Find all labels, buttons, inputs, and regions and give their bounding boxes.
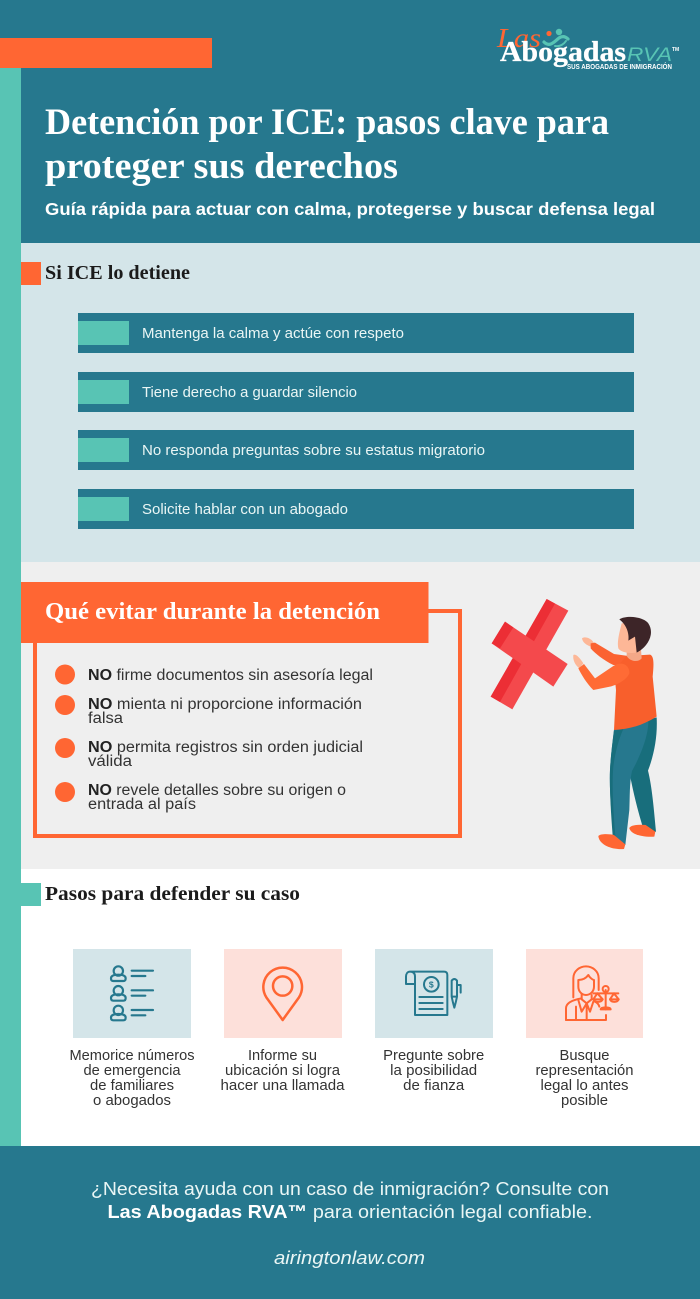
item 3: NO permita registros sin orden judicial [88, 739, 363, 756]
website: airingtonlaw.com [274, 1247, 425, 1268]
header panel [0, 0, 700, 243]
caption: representación [536, 1063, 634, 1079]
caption: legal lo antes [540, 1078, 628, 1094]
logo figures [544, 29, 568, 46]
logo: Abogadas [500, 37, 626, 68]
step 3 [375, 949, 493, 1094]
subtitle: Guía rápida para actuar con calma, protegerse y buscar defensa legal [45, 199, 655, 219]
caption: Informe su [248, 1048, 317, 1064]
caption: hacer una llamada [220, 1078, 345, 1094]
call to action: ¿Necesita ayuda con un caso de inmigración? Consulte con [91, 1178, 609, 1199]
panel: qué evitar [21, 562, 700, 869]
illustration: red cross [491, 599, 568, 709]
outlined box [35, 611, 460, 836]
title: proteger sus derechos [45, 146, 398, 187]
heading marker [21, 262, 41, 285]
caption [383, 1048, 484, 1094]
item 3: válida [88, 753, 132, 770]
icon: bail document and pen [406, 972, 461, 1015]
caption [536, 1048, 634, 1109]
footer panel [0, 1146, 700, 1299]
icon: contacts list [111, 966, 153, 1020]
row 4: Solicite hablar con un abogado [142, 501, 348, 518]
caption [220, 1048, 345, 1094]
caption: de emergencia [84, 1063, 181, 1079]
step 1 [70, 949, 194, 1109]
icon: location pin [263, 968, 302, 1020]
caption: posible [561, 1093, 608, 1109]
heading banner: Qué evitar durante la detención [45, 598, 380, 625]
item 2 [55, 695, 362, 727]
item 2: falsa [88, 710, 123, 727]
icon: lawyer with scales [566, 966, 619, 1020]
caption [70, 1048, 194, 1109]
caption: Pregunte sobre [383, 1048, 484, 1064]
caption: Memorice números [70, 1048, 194, 1064]
caption: Busque [560, 1048, 610, 1064]
row 2: Tiene derecho a guardar silencio [142, 384, 357, 401]
caption: la posibilidad [390, 1063, 477, 1079]
left accent strip [0, 68, 21, 1146]
caption: de familiares [90, 1078, 174, 1094]
caption: de fianza [403, 1078, 465, 1094]
call to action [91, 1178, 609, 1222]
logo: SUS ABOGADAS DE INMIGRACIÓN [567, 62, 672, 71]
title: Detención por ICE: pasos clave para [45, 102, 609, 143]
step 2 [220, 949, 345, 1094]
item 4 [55, 782, 346, 813]
logo: TM [672, 47, 679, 53]
item 2: NO mienta ni proporcione información [88, 696, 362, 713]
item 4: NO revele detalles sobre su origen o [88, 782, 346, 799]
caption: ubicación si logra [225, 1063, 341, 1079]
heading: Si ICE lo detiene [45, 262, 190, 284]
heading: Pasos para defender su caso [45, 883, 300, 905]
panel: si ICE lo detiene [21, 243, 700, 562]
item 4: entrada al país [88, 796, 196, 813]
item 1: NO firme documentos sin asesoría legal [88, 667, 373, 684]
orange accent bar [0, 38, 212, 68]
illustration: person [573, 617, 657, 849]
heading marker [21, 883, 41, 906]
row 1: Mantenga la calma y actúe con respeto [142, 325, 404, 342]
heading banner [21, 582, 428, 643]
caption: o abogados [93, 1093, 171, 1109]
row 4 [78, 489, 634, 529]
row 3: No responda preguntas sobre su estatus migratorio [142, 442, 485, 459]
icon: bail document and pen: $ [429, 979, 434, 989]
call to action: Las Abogadas RVA™ para orientación legal confiable. [108, 1201, 592, 1222]
row 3 [78, 430, 634, 470]
row 1 [78, 313, 634, 353]
item 3 [55, 738, 363, 770]
logo: Las [496, 23, 541, 53]
row 2 [78, 372, 634, 412]
panel: pasos para defender su caso [21, 869, 700, 1146]
logo [496, 23, 679, 71]
logo: RVA [627, 45, 672, 66]
title [45, 102, 609, 187]
step 4 [526, 949, 643, 1109]
